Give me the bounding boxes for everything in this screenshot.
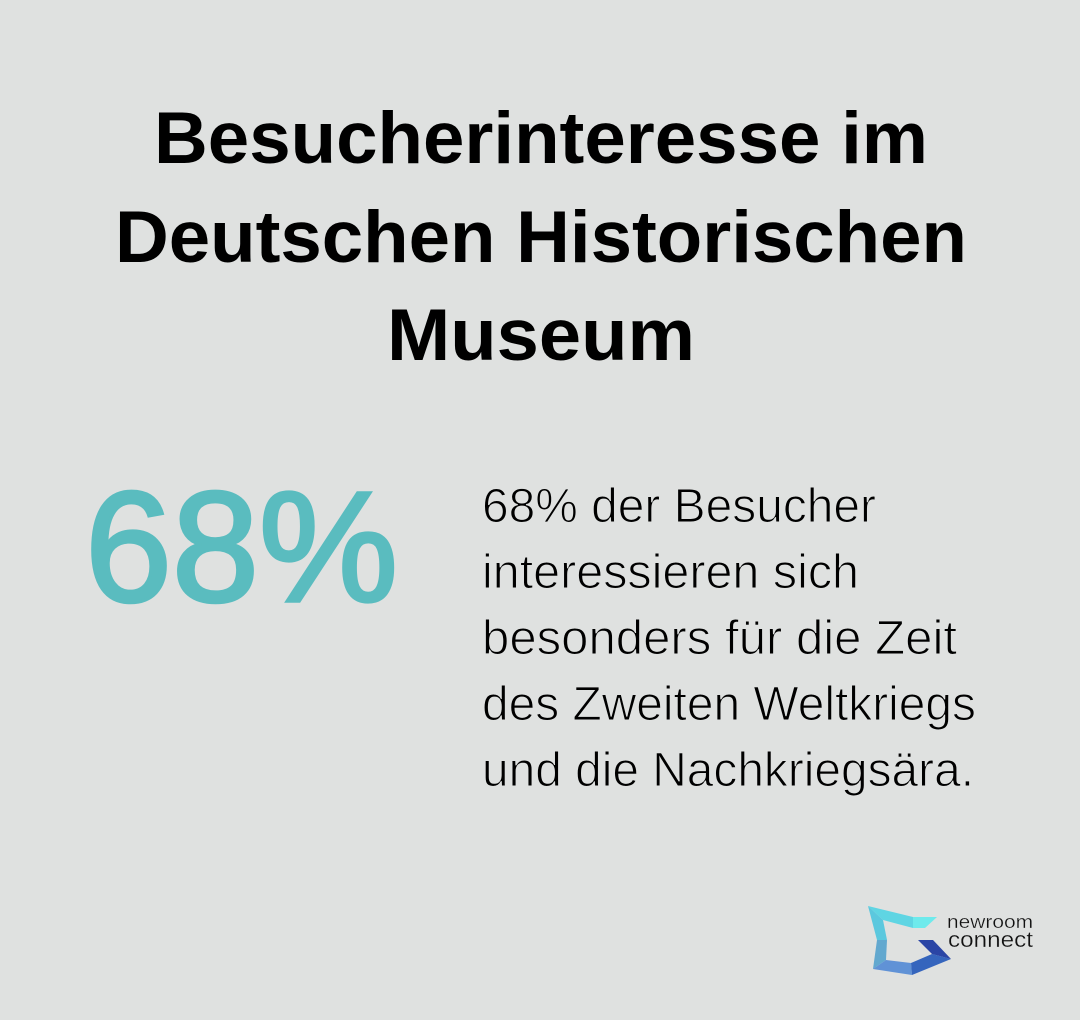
- logo wordmark: connect: [948, 927, 1033, 952]
- logo wordmark: [947, 912, 1033, 952]
- description text: des Zweiten Weltkriegs: [482, 678, 976, 731]
- title: Museum: [387, 295, 695, 376]
- description text: interessieren sich: [482, 546, 859, 599]
- description text: 68% der Besucher: [482, 480, 876, 533]
- logo icon: [868, 906, 951, 975]
- title: Deutschen Historischen: [115, 197, 967, 278]
- description text: und die Nachkriegsära.: [482, 744, 974, 797]
- description text: besonders für die Zeit: [482, 612, 957, 665]
- title: Besucherinteresse im: [154, 98, 928, 179]
- big statistic: 68%: 68%: [85, 460, 398, 635]
- title: [115, 98, 967, 376]
- logo wordmark: newroom: [947, 912, 1033, 932]
- description text: [482, 480, 976, 797]
- logo: newroom connect: [868, 906, 1033, 975]
